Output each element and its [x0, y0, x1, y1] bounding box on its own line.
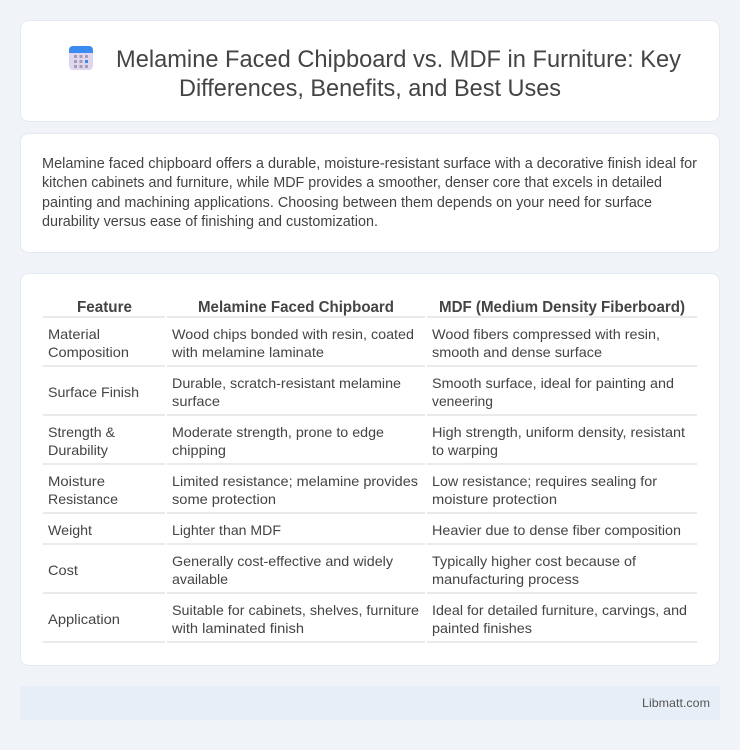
row: strength and durability: [43, 424, 697, 465]
intro text: Melamine faced chipboard offers a durable, moisture-resistant surface with a decorative finish ideal for: [42, 156, 697, 172]
title: [116, 46, 681, 102]
footer: [20, 686, 720, 720]
row: weight: Weight: [48, 522, 92, 538]
intro text: durability versus ease of finishing and customization.: [42, 214, 378, 230]
icon: calendar grid: [69, 46, 93, 70]
table header row: Melamine Faced Chipboard: [198, 299, 394, 316]
row: strength and durability: Durability: [48, 442, 108, 458]
row: strength and durability: to warping: [432, 442, 498, 458]
row: weight: [43, 522, 697, 545]
row: application: painted finishes: [432, 620, 532, 636]
row: cost: manufacturing process: [432, 571, 579, 587]
row: application: Suitable for cabinets, shelves, furniture: [172, 602, 419, 618]
intro text: [42, 156, 697, 230]
panel: introduction: [20, 134, 720, 252]
row: material composition: with melamine laminate: [171, 344, 324, 360]
row: cost: [43, 553, 697, 594]
row: material composition: Wood fibers compressed with resin,: [432, 326, 660, 342]
row: cost: Typically higher cost because of: [432, 553, 636, 569]
row: weight: Lighter than MDF: [172, 522, 281, 538]
row: strength and durability: High strength, uniform density, resistant: [432, 424, 685, 440]
row: weight: Heavier due to dense fiber composition: [432, 522, 681, 538]
row: cost: Cost: [48, 562, 78, 578]
table header row: MDF (Medium Density Fiberboard): [439, 299, 685, 316]
row: material composition: Composition: [48, 344, 129, 360]
row: surface finish: Durable, scratch-resistant melamine: [172, 375, 401, 391]
footer: Libmatt.com: [642, 696, 710, 710]
row: application: [43, 602, 697, 643]
row: moisture resistance: Resistance: [48, 491, 118, 507]
row: moisture resistance: [43, 473, 697, 514]
row: application: Ideal for detailed furniture, carvings, and: [432, 602, 687, 618]
table header row: Feature: [77, 299, 132, 316]
row: material composition: Wood chips bonded with resin, coated: [172, 326, 414, 342]
row: cost: Generally cost-effective and widely: [172, 553, 393, 569]
intro text: kitchen cabinets and furniture, while MDF provides a smoother, denser core that excels in detailed: [42, 175, 662, 191]
row: strength and durability: Strength &: [48, 424, 116, 440]
row: strength and durability: chipping: [172, 442, 226, 458]
row: moisture resistance: Low resistance; requires sealing for: [432, 473, 657, 489]
row: moisture resistance: Moisture: [48, 473, 105, 489]
panel: title card: [20, 20, 720, 122]
title: Melamine Faced Chipboard vs. MDF in Furniture: Key: [116, 46, 681, 73]
row: cost: available: [172, 571, 228, 587]
row: surface finish: Surface Finish: [48, 384, 139, 400]
row: material composition: smooth and dense surface: [432, 344, 602, 360]
row: surface finish: surface: [172, 393, 220, 409]
panel: comparison table: [20, 274, 720, 666]
row: moisture resistance: Limited resistance; melamine provides: [172, 473, 418, 489]
row: moisture resistance: some protection: [172, 491, 276, 507]
row: moisture resistance: moisture protection: [432, 491, 557, 507]
title: Differences, Benefits, and Best Uses: [179, 75, 561, 102]
row: surface finish: [43, 375, 697, 416]
row: application: with laminated finish: [171, 620, 304, 636]
row: strength and durability: Moderate strength, prone to edge: [172, 424, 384, 440]
row: application: Application: [48, 611, 120, 627]
row: surface finish: veneering: [432, 393, 493, 409]
row: material composition: [43, 326, 697, 367]
intro text: painting and machining applications. Choosing between them depends on your need for surface: [42, 195, 652, 211]
row: material composition: Material: [48, 326, 100, 342]
table header row: [43, 299, 697, 318]
row: surface finish: Smooth surface, ideal for painting and: [432, 375, 674, 391]
